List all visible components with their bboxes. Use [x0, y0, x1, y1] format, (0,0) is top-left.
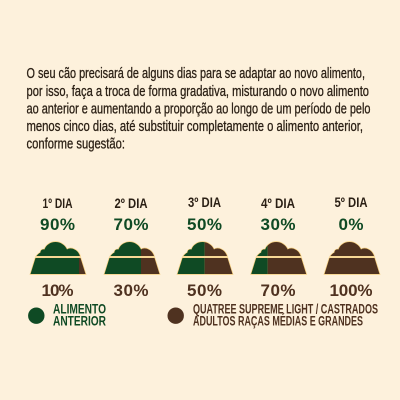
- bowl 1: [30, 242, 87, 276]
- legend: previous food: ALIMENTO: [53, 302, 106, 316]
- day 3 column: [177, 194, 235, 300]
- bowl 2: [104, 242, 161, 276]
- day 2 column: 2º DIA: [114, 195, 148, 211]
- legend: previous food: ANTERIOR: [53, 314, 106, 328]
- day 1 column: 90%: [40, 215, 75, 234]
- day 3 column: 50%: [187, 281, 222, 300]
- bowl 5: [324, 242, 381, 276]
- day 4 column: [251, 195, 308, 300]
- legend: previous food: [28, 302, 106, 328]
- day 4 column: 70%: [260, 281, 296, 300]
- day 1 column: 10%: [42, 281, 74, 300]
- day 2 column: 70%: [114, 215, 148, 234]
- day 2 column: [104, 195, 161, 300]
- day 3 column: 50%: [187, 215, 222, 234]
- intro text: [26, 66, 370, 152]
- day 2 column: 30%: [114, 281, 148, 300]
- day 5 column: 0%: [338, 215, 364, 234]
- day 4 column: 4º DIA: [261, 195, 295, 211]
- bowl 4: [251, 242, 308, 276]
- day 5 column: [324, 194, 381, 300]
- intro text: conforme sugestão:: [26, 136, 125, 152]
- day 3 column: 3º DIA: [188, 194, 221, 210]
- day 5 column: 100%: [330, 281, 372, 300]
- day 5 column: 5º DIA: [334, 194, 368, 210]
- legend: new food: [168, 302, 378, 328]
- day 1 column: [30, 195, 87, 300]
- day 4 column: 30%: [260, 215, 296, 234]
- day 1 column: 1º DIA: [42, 195, 72, 211]
- bowl 3: [177, 242, 235, 276]
